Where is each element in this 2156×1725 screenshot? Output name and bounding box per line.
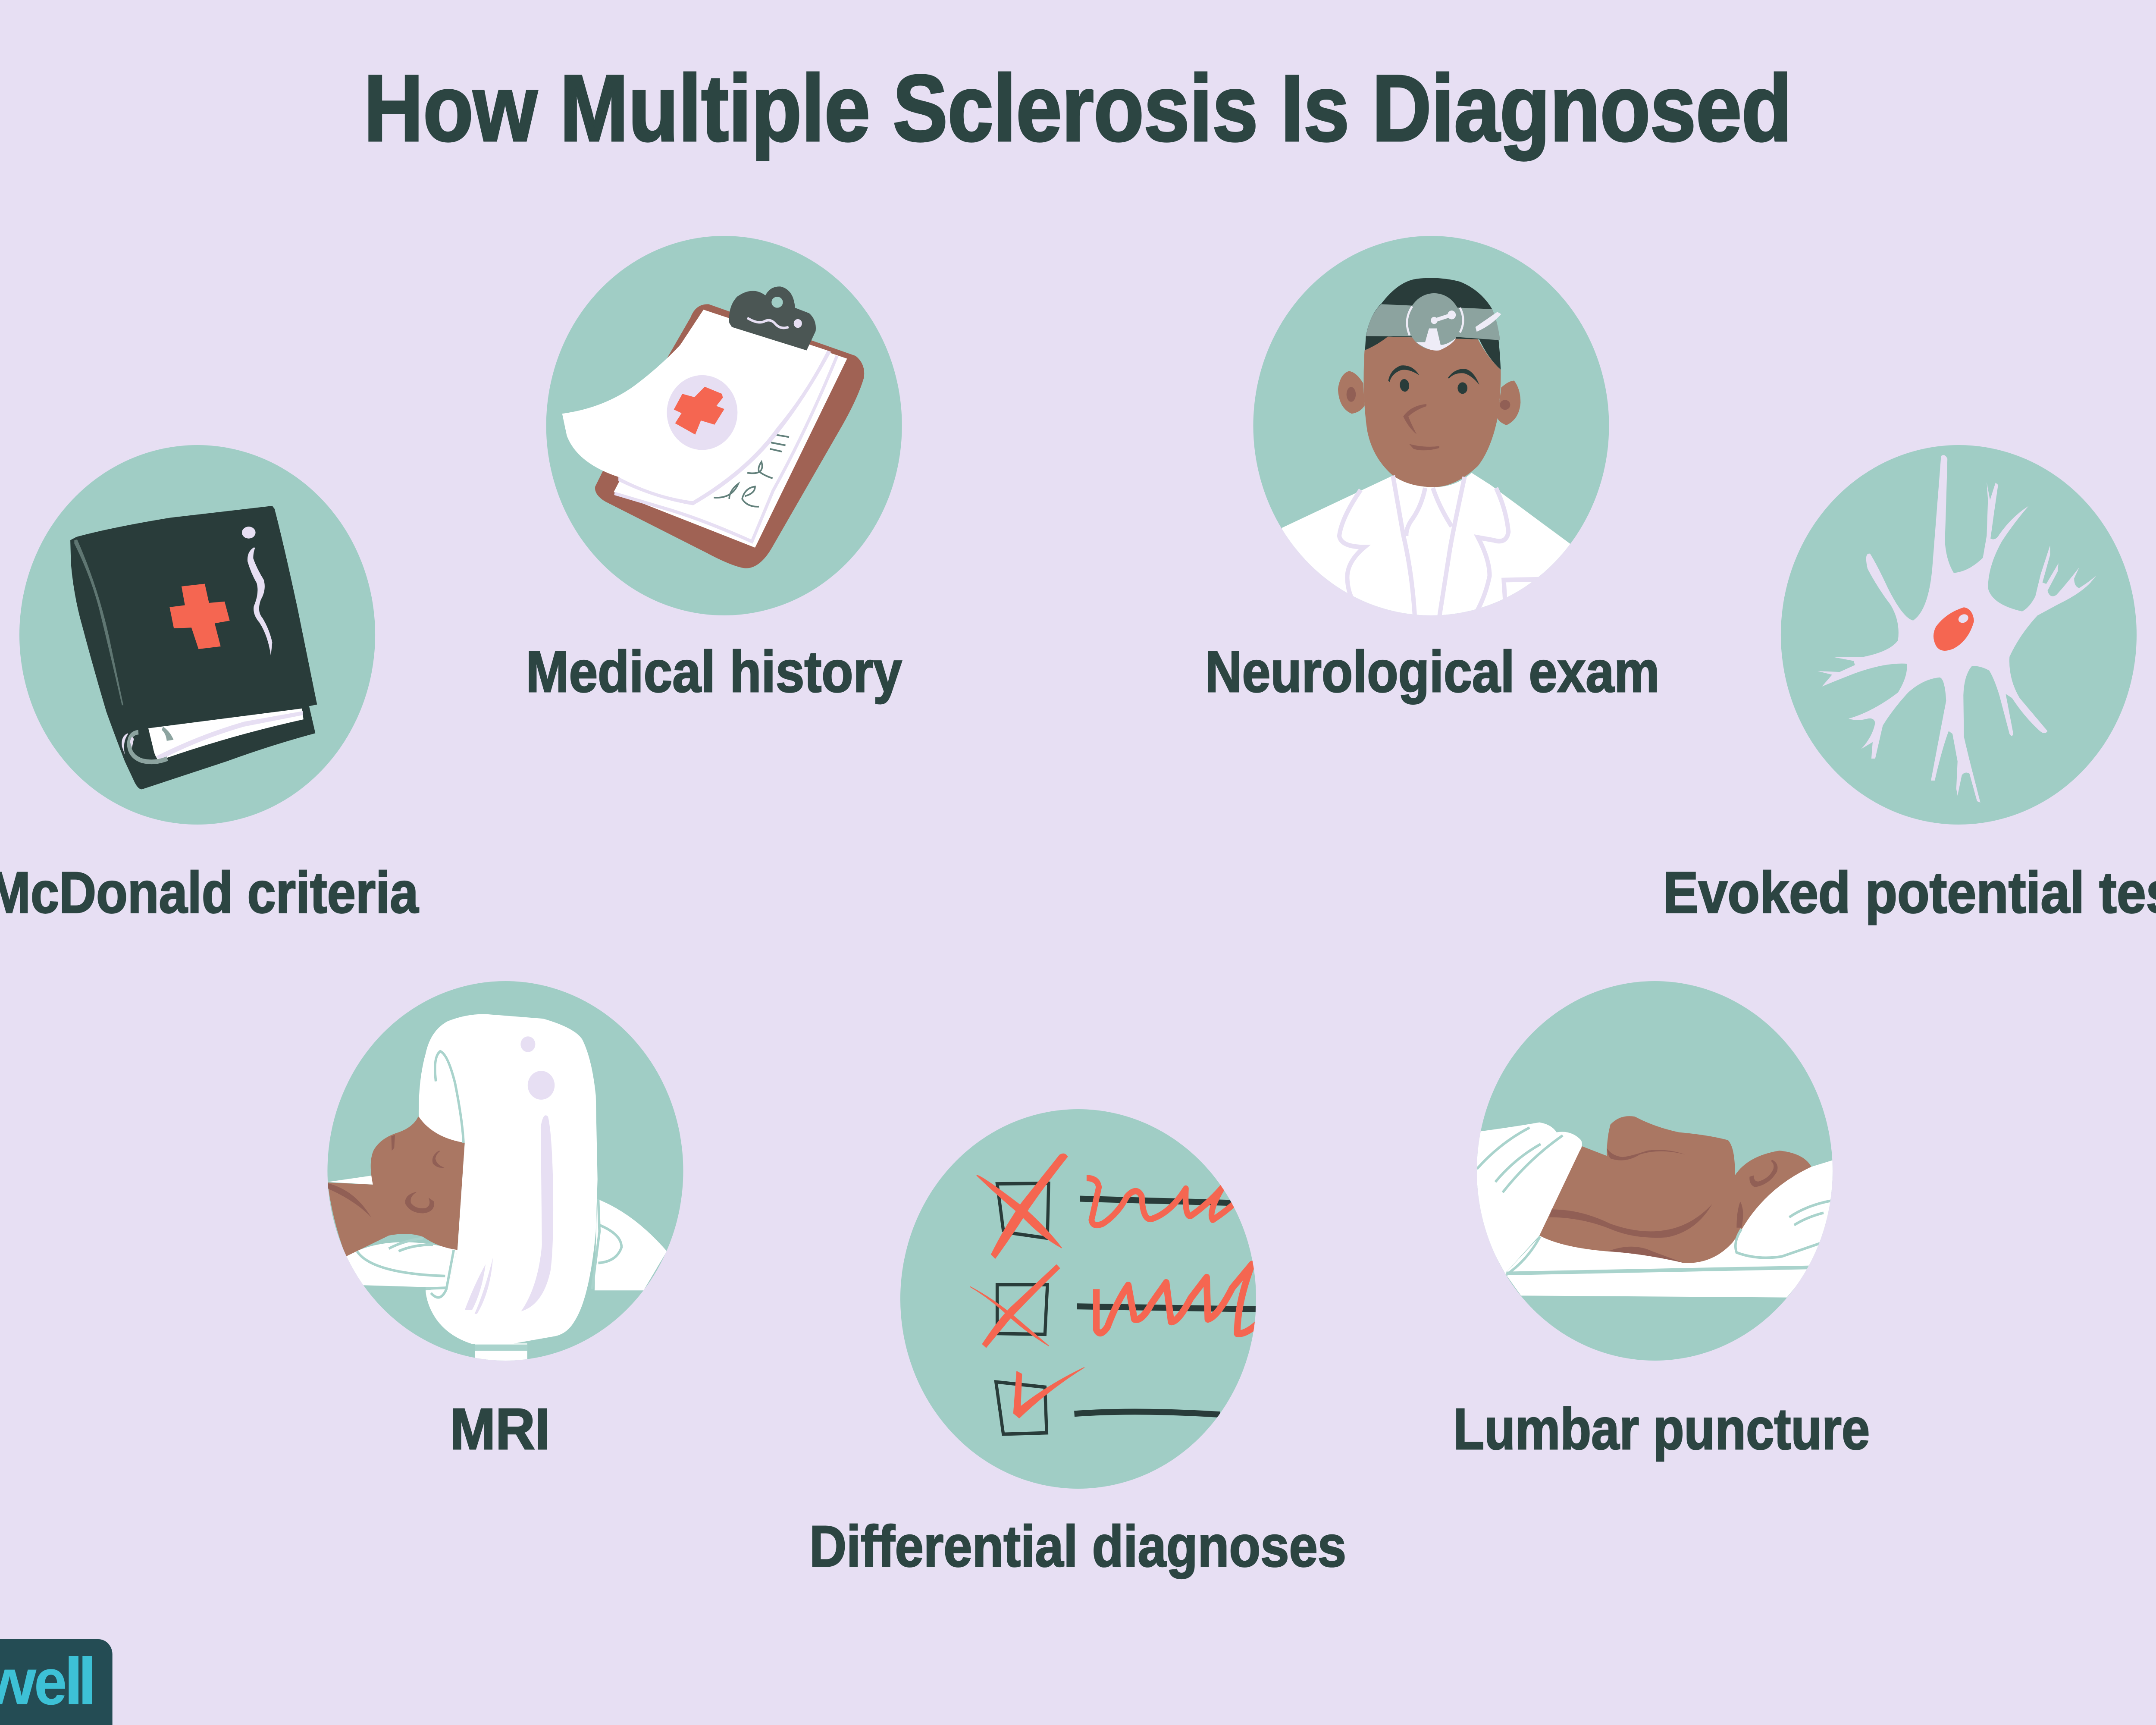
panel: Medical history: [546, 236, 902, 615]
panel: Neurological exam: [1253, 236, 1609, 656]
title: How Multiple Sclerosis Is Diagnosed: [364, 56, 1792, 160]
label: Medical history: Medical history: [526, 639, 902, 704]
panel: McDonald criteria: [19, 445, 375, 825]
icon: clipboard: [562, 286, 864, 568]
label: Differential diagnoses: Differential diagnoses: [809, 1514, 1346, 1579]
label: Lumbar puncture: Lumbar puncture: [1454, 1396, 1870, 1462]
icon: doctor: [1282, 278, 1570, 615]
icon: checklist: [970, 1154, 1257, 1434]
logo: verywell: e: [34, 1646, 67, 1719]
panel: Evoked potential test: [1781, 445, 2137, 825]
label: MRI: MRI: [450, 1396, 550, 1462]
icon: neuron: [1818, 455, 2096, 803]
label: McDonald criteria: McDonald criteria: [0, 860, 419, 925]
panel: Lumbar puncture: [1471, 981, 1838, 1361]
panel: Differential diagnoses: [900, 1109, 1257, 1489]
panel: MRI: [327, 981, 683, 1364]
label: Neurological exam: Neurological exam: [1205, 639, 1660, 704]
logo: verywell: [0, 1639, 113, 1725]
icon: medical book: [70, 506, 317, 789]
icon: patient lying on side: [1471, 1116, 1838, 1298]
icon: MRI scanner with patient: [328, 1014, 667, 1364]
